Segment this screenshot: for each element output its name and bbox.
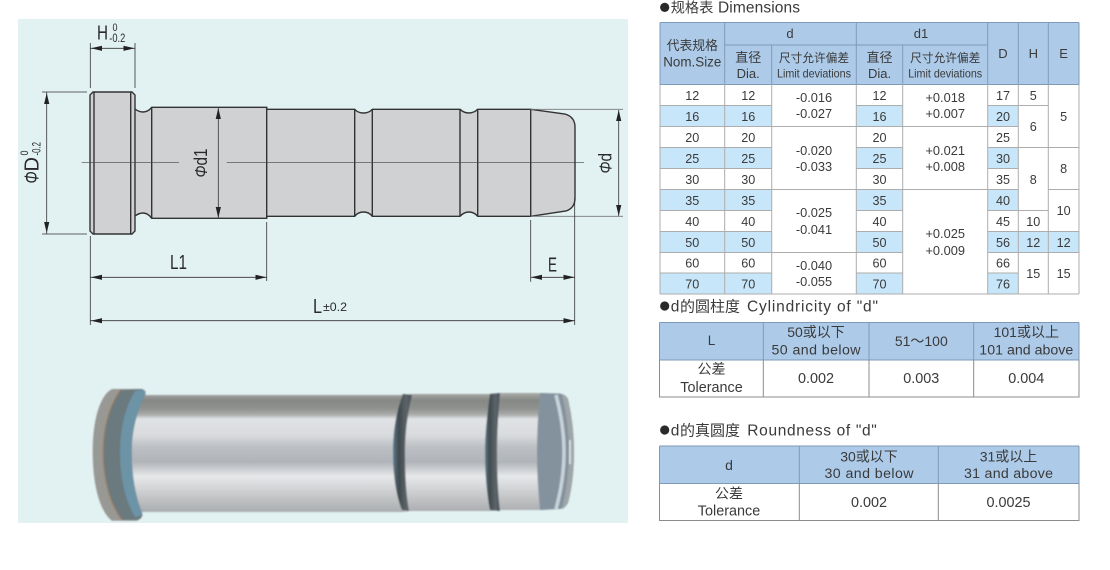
dimension: phi d — [531, 109, 623, 216]
column: nominal size: 50 — [685, 236, 699, 250]
column: d diameter: 20 — [741, 131, 755, 145]
column: d limit deviations: -0.040 — [796, 258, 832, 273]
column: d1 limit deviations — [925, 90, 965, 258]
column: d1 diameter — [872, 89, 887, 292]
table header text: 直径 — [866, 50, 893, 65]
column: d1 diameter: 70 — [872, 278, 887, 292]
cylindricity text: 50 and below — [772, 342, 861, 358]
drawing: post silhouette — [90, 92, 575, 234]
column: d limit deviations — [796, 90, 832, 289]
dimension: H: 0 — [112, 22, 118, 34]
column: d1 diameter: 60 — [872, 256, 887, 270]
column: d1 diameter: 30 — [872, 173, 887, 187]
dimension: E: E — [548, 255, 557, 277]
column: d limit deviations: -0.016 — [796, 90, 832, 105]
dimension: L1: L1 — [170, 252, 187, 274]
dimension: phi d1 — [191, 108, 221, 218]
column: d diameter: 50 — [741, 236, 755, 250]
table header text: 代表规格 — [667, 38, 718, 53]
column: d limit deviations: -0.025 — [796, 205, 832, 220]
heading: cylindricity — [660, 299, 878, 316]
table header text: d — [786, 26, 794, 41]
column: d diameter: 60 — [741, 256, 755, 270]
heading: roundness: d — [671, 423, 679, 440]
column: d1 diameter: 35 — [872, 194, 887, 208]
photo: groove 2 — [485, 393, 500, 511]
column: d1 limit deviations: +0.021 — [925, 143, 965, 158]
column: D: 45 — [996, 215, 1010, 229]
dimension: H: H — [97, 22, 108, 44]
table header text: 尺寸允许偏差 — [779, 51, 849, 65]
photo: steel guide post — [93, 389, 574, 521]
column: d1 limit deviations: +0.008 — [925, 159, 965, 174]
roundness text: 30 and below — [824, 466, 914, 482]
column: d1 diameter: 16 — [872, 110, 887, 124]
column: nominal size: 16 — [685, 110, 699, 124]
table header text: 尺寸允许偏差 — [910, 51, 980, 65]
heading: dimensions: Dimensions — [718, 0, 800, 16]
column: d1 limit deviations: +0.025 — [925, 226, 965, 241]
photo: flange — [93, 389, 146, 521]
column: d1 diameter: 25 — [872, 152, 887, 166]
roundness text: 31 and above — [964, 466, 1053, 482]
column: D: 17 — [996, 89, 1010, 103]
heading: roundness: Roundness of "d" — [747, 423, 877, 440]
dimension: phi D: D — [21, 157, 43, 172]
dimension: L — [90, 296, 575, 323]
column: d diameter: 12 — [741, 89, 755, 103]
column: D: 20 — [996, 110, 1010, 124]
dimension: H — [90, 22, 135, 88]
column: nominal size — [685, 89, 699, 292]
column: D: 30 — [996, 152, 1010, 166]
cylindricity text: 50或以下 — [787, 324, 845, 340]
column: d1 limit deviations: +0.018 — [925, 90, 965, 105]
column: H: 10 — [1026, 215, 1040, 229]
column: d1 diameter: 40 — [872, 215, 887, 229]
column: nominal size: 20 — [685, 131, 699, 145]
table header text: D — [998, 46, 1008, 61]
roundness text: 30或以下 — [840, 448, 898, 464]
drawing: center line — [82, 161, 584, 163]
table header text: H — [1029, 46, 1038, 61]
cylindricity text: L — [708, 333, 716, 348]
table header text: Dia. — [737, 66, 760, 81]
column: d1 diameter: 20 — [872, 131, 887, 145]
column: H — [1026, 89, 1040, 281]
table header text: E — [1059, 46, 1068, 61]
column: d limit deviations: -0.033 — [796, 159, 832, 174]
column: d1 limit deviations: +0.007 — [925, 106, 965, 121]
table header text: Limit deviations — [777, 66, 851, 80]
panel: product illustration background — [18, 19, 628, 523]
table header text: 直径 — [735, 50, 761, 65]
column: d diameter: 16 — [741, 110, 755, 124]
column: E: 8 — [1060, 162, 1067, 176]
dimension: phi d: d — [596, 153, 616, 162]
column: E: 12 — [1057, 236, 1071, 250]
column: H: 6 — [1030, 120, 1037, 134]
column: d1 limit deviations: +0.009 — [925, 243, 965, 258]
photo: shaft body — [125, 393, 545, 512]
dimension: phi D: Φ — [21, 172, 43, 184]
column: D: 76 — [996, 278, 1010, 292]
dimension: E — [531, 198, 575, 325]
column: nominal size: 70 — [685, 278, 699, 292]
column: E — [1057, 110, 1071, 281]
column: d limit deviations: -0.041 — [796, 222, 832, 237]
photo: nose end — [537, 393, 574, 510]
table header text: Limit deviations — [908, 66, 982, 80]
column: E: 10 — [1057, 204, 1071, 218]
column: d diameter: 35 — [741, 194, 755, 208]
dimension: phi D: 0 — [19, 150, 31, 156]
table header text: Dia. — [868, 66, 891, 81]
column: d limit deviations: -0.055 — [796, 274, 832, 289]
column: d limit deviations: -0.020 — [796, 143, 832, 158]
column: d diameter: 70 — [741, 278, 755, 292]
cylindricity text: 0.004 — [1008, 371, 1044, 387]
heading: cylindricity: 的圆柱度 — [680, 299, 740, 316]
column: D: 56 — [996, 236, 1010, 250]
dimension: phi D: -0.2 — [30, 142, 44, 156]
table header text — [663, 26, 1068, 81]
cylindricity text: 0.003 — [903, 371, 939, 387]
cylindricity text: 101 and above — [979, 342, 1073, 358]
photo: groove 1 — [393, 394, 412, 511]
table: roundness — [660, 446, 1079, 520]
cylindricity header background — [660, 322, 1079, 360]
heading: dimensions — [660, 0, 800, 16]
column: H: 15 — [1026, 267, 1040, 281]
heading: dimensions: 规格表 — [671, 0, 713, 16]
roundness text: 31或以上 — [980, 448, 1037, 464]
column: nominal size: 12 — [685, 89, 699, 103]
column: d diameter: 30 — [741, 173, 755, 187]
heading: cylindricity: Cylindricity of "d" — [747, 299, 878, 316]
column: d diameter: 40 — [741, 215, 755, 229]
dimension: phi D — [19, 92, 87, 234]
column: E: 15 — [1057, 267, 1071, 281]
column: D: 40 — [996, 194, 1010, 208]
column: d diameter — [741, 89, 755, 292]
dimension: phi d1: Φ — [191, 166, 211, 178]
dimension: L: L — [313, 296, 322, 318]
roundness header background — [660, 446, 1079, 484]
roundness text: Tolerance — [698, 504, 760, 520]
cylindricity text — [680, 324, 1073, 396]
column: nominal size: 30 — [685, 173, 699, 187]
column: D: 25 — [996, 131, 1010, 145]
table header text: Nom.Size — [663, 54, 721, 70]
column: d1 diameter: 12 — [872, 89, 887, 103]
technical drawing of guide post — [19, 22, 623, 325]
cylindricity text: Tolerance — [680, 380, 743, 396]
heading: cylindricity: d — [671, 299, 679, 316]
cylindricity text: 公差 — [698, 361, 726, 377]
column: d limit deviations: -0.027 — [796, 106, 832, 121]
column: d1 diameter: 50 — [872, 236, 887, 250]
column: nominal size: 25 — [685, 152, 699, 166]
cylindricity text: 51～100 — [895, 333, 948, 349]
column: nominal size: 60 — [685, 256, 699, 270]
heading: roundness — [660, 422, 877, 440]
table header text: d1 — [914, 26, 928, 41]
column: nominal size: 40 — [685, 215, 699, 229]
roundness text: 0.002 — [851, 495, 887, 511]
column: H: 12 — [1026, 236, 1040, 250]
table: cylindricity — [660, 322, 1079, 397]
roundness text: 公差 — [715, 486, 743, 502]
dimension: L: ±0.2 — [323, 302, 347, 314]
column: H: 8 — [1030, 173, 1037, 187]
column: nominal size: 35 — [685, 194, 699, 208]
dimension: phi d1: d1 — [191, 148, 211, 166]
roundness text: 0.0025 — [986, 495, 1031, 511]
roundness text — [698, 448, 1053, 520]
dimension: phi d: Φ — [596, 162, 616, 174]
column: D — [996, 89, 1010, 292]
alternating row fills — [660, 106, 1079, 294]
dimension: L1 — [90, 222, 267, 325]
column: H: 5 — [1030, 89, 1037, 103]
heading: roundness: 的真圆度 — [680, 422, 740, 440]
column: d diameter: 25 — [741, 152, 755, 166]
roundness text: d — [725, 457, 733, 473]
table header background — [660, 22, 1079, 84]
table: dimensions — [660, 22, 1079, 294]
column: D: 35 — [996, 173, 1010, 187]
column: E: 5 — [1060, 110, 1067, 124]
dimension: H: -0.2 — [109, 31, 126, 45]
cylindricity text: 101或以上 — [994, 324, 1059, 340]
cylindricity text: 0.002 — [798, 371, 834, 387]
column: D: 66 — [996, 256, 1010, 270]
